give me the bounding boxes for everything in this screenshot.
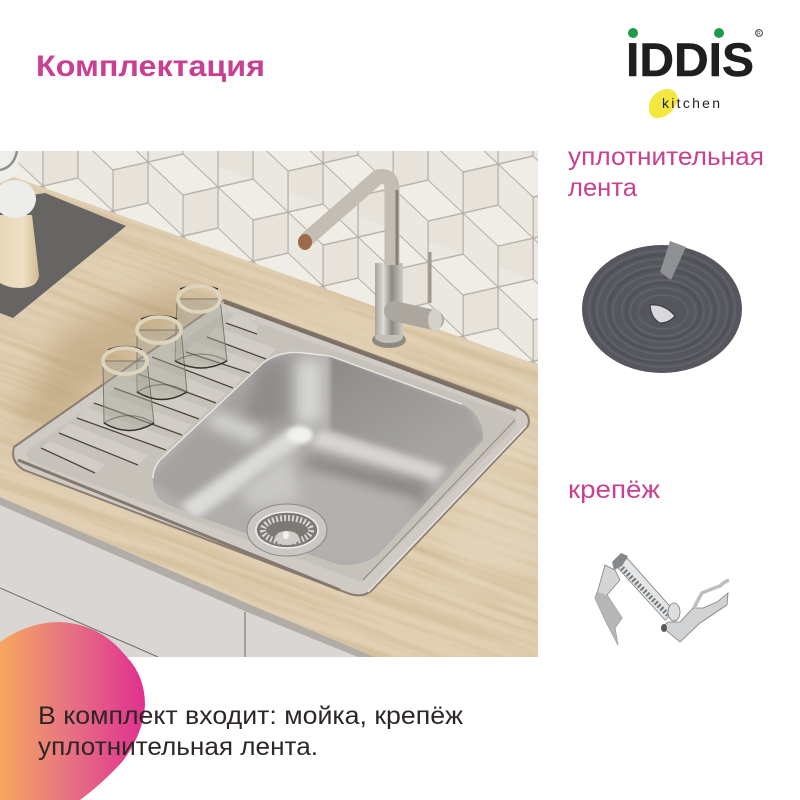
- pepper mill and plates: [0, 151, 39, 288]
- glasses: [103, 286, 227, 430]
- icon: sealing tape coil: [582, 241, 742, 373]
- logo: IDDIS kitchen: R: [757, 31, 761, 37]
- cabinet fronts: [0, 497, 375, 657]
- logo: IDDIS kitchen: kitchen: [662, 95, 720, 111]
- description text: [38, 702, 463, 761]
- drain strainer: [247, 504, 327, 556]
- drainer ribs: [41, 313, 276, 473]
- label: sealing tape: лента: [568, 174, 637, 202]
- label: fasteners: крепёж: [568, 476, 660, 504]
- description text: В комплект входит: мойка, крепёж: [38, 702, 463, 730]
- faucet: [298, 177, 442, 348]
- label: sealing tape: уплотнительная: [568, 143, 764, 171]
- logo: IDDIS kitchen: [626, 28, 762, 118]
- backsplash tiles: [14, 151, 538, 365]
- icon: mounting clip: [595, 553, 729, 645]
- basin: [153, 353, 483, 565]
- worktop: [0, 177, 538, 657]
- label: sealing tape: [568, 143, 764, 202]
- decorative gradient circle: [0, 622, 145, 800]
- sink: [13, 300, 529, 595]
- logo: IDDIS kitchen: IDDIS: [626, 33, 754, 86]
- panel: sink photo: [0, 151, 538, 657]
- overflow slots: [206, 421, 227, 440]
- cutting mat: [0, 193, 126, 318]
- title: Комплектация: [36, 50, 265, 83]
- description text: уплотнительная лента.: [38, 733, 318, 761]
